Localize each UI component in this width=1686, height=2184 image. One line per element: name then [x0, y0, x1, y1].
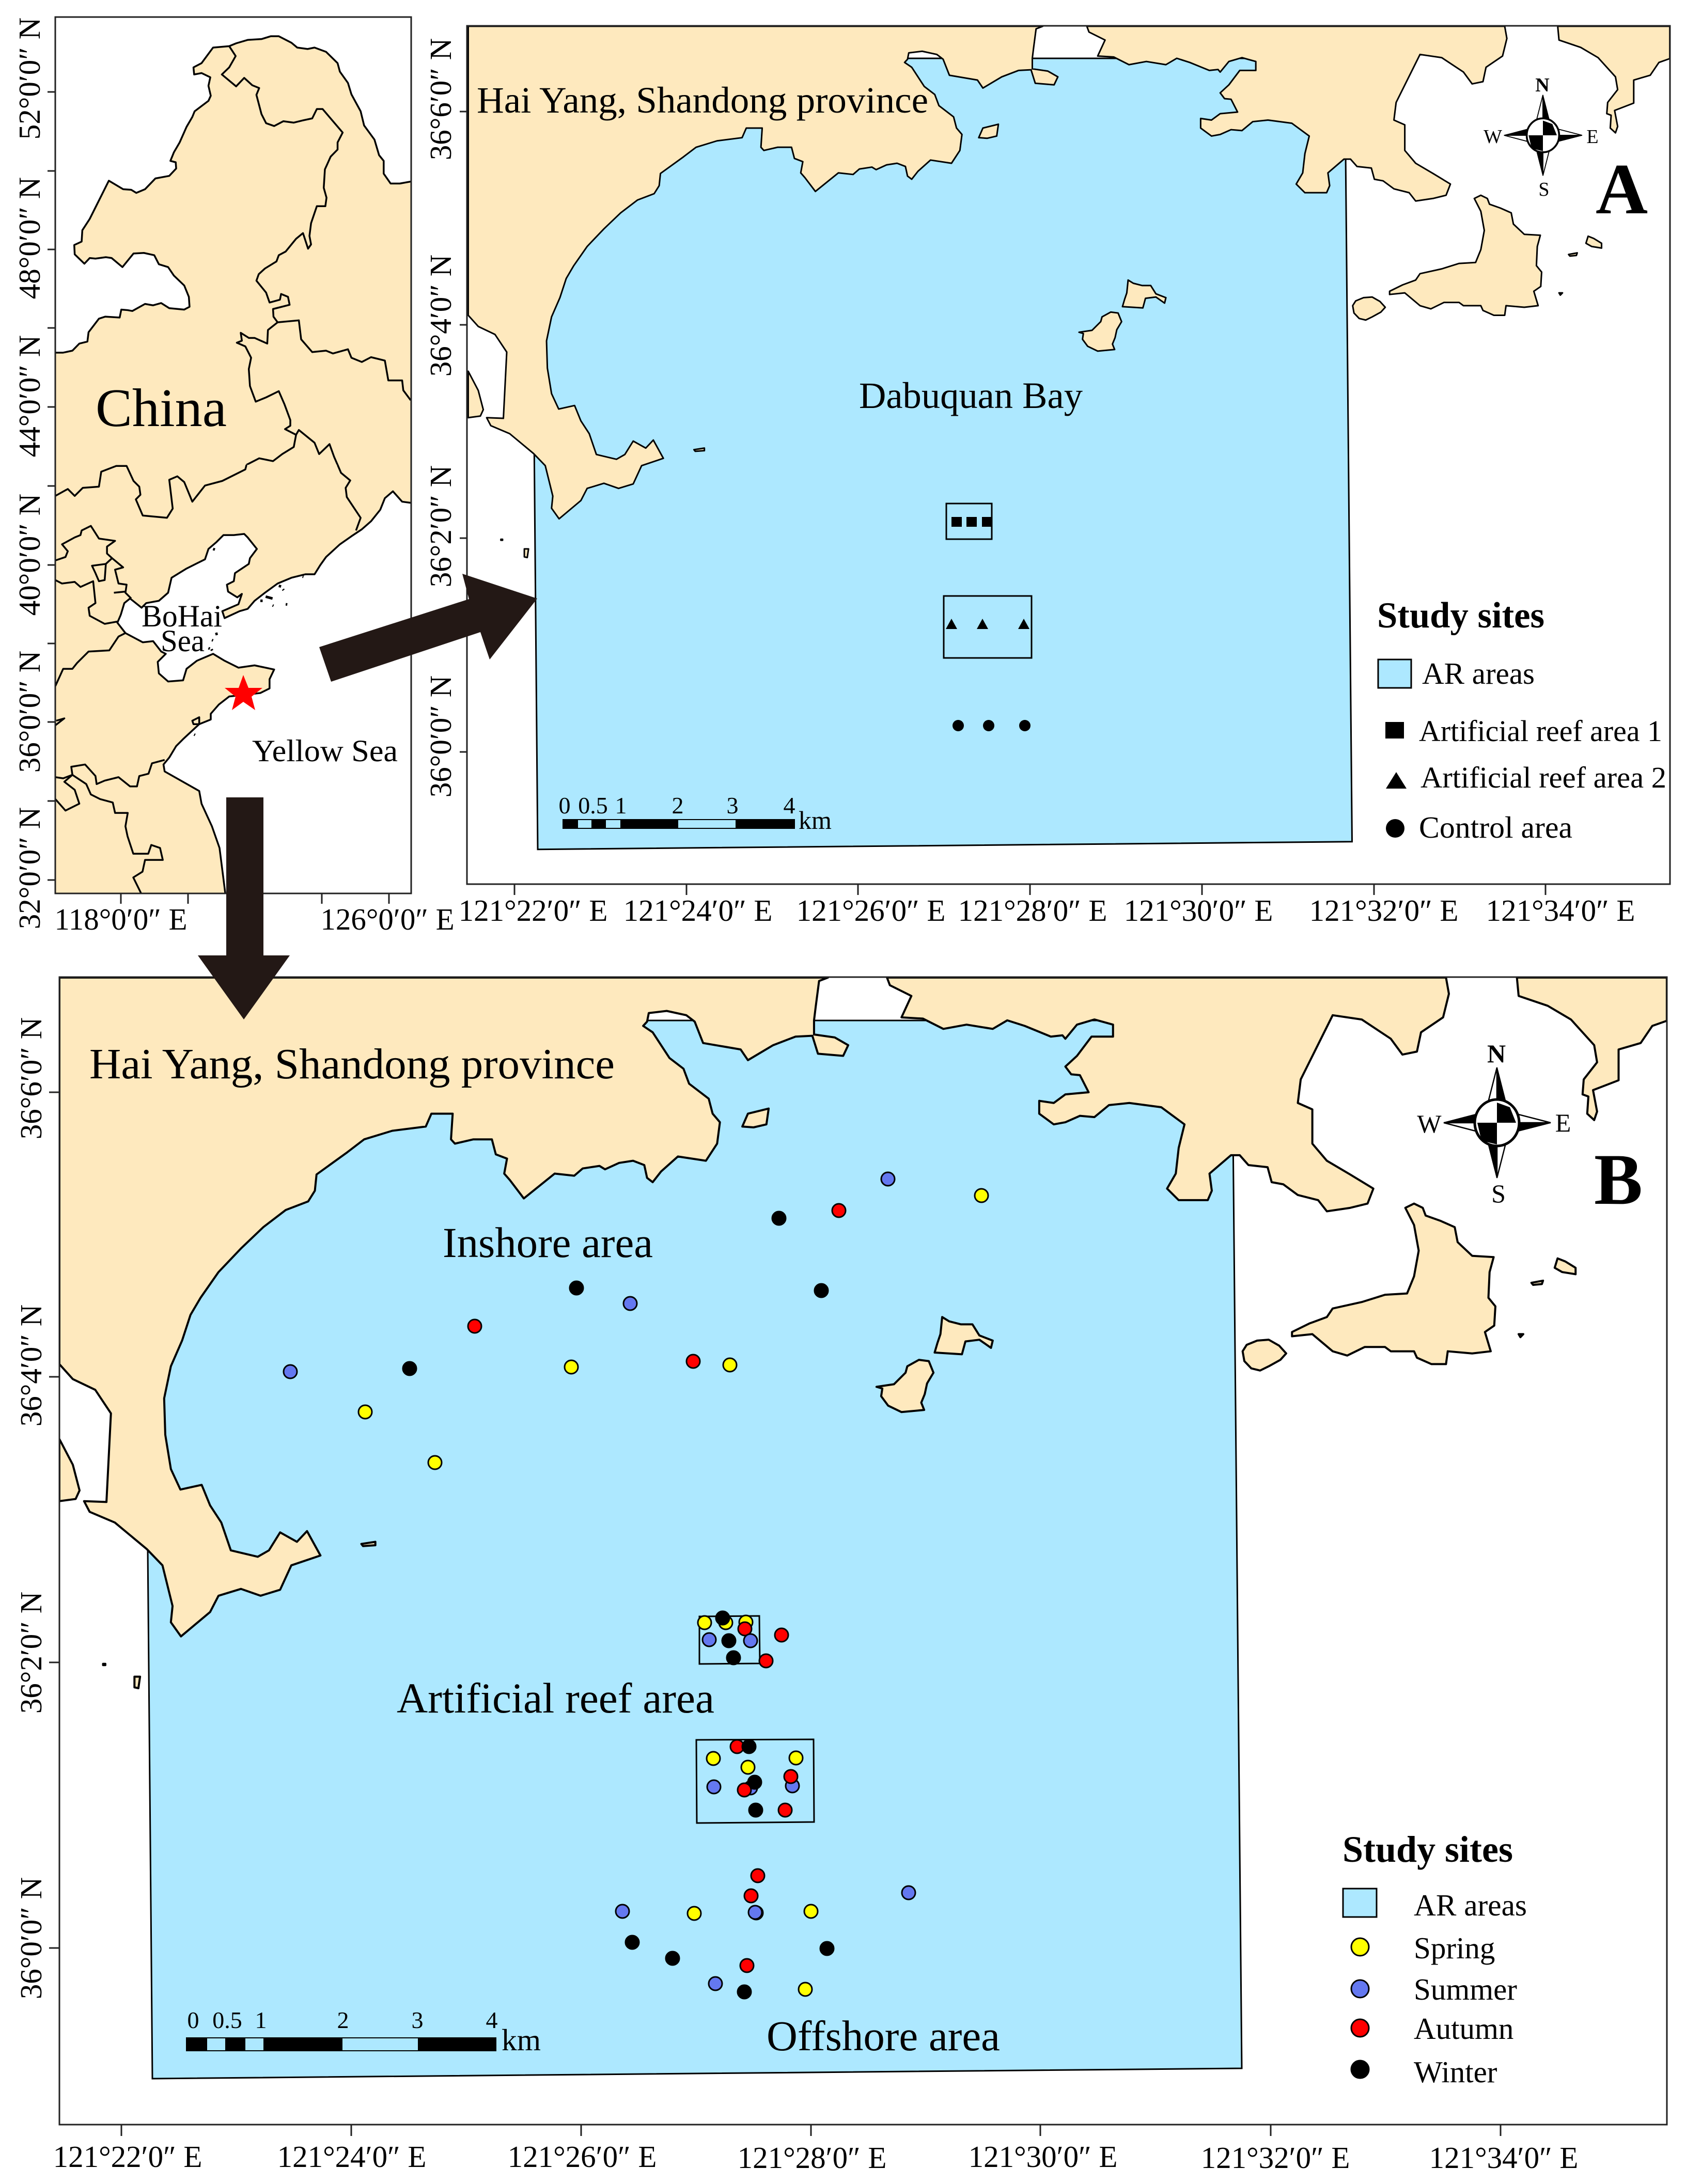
panel B longitude labels: 121°26′0″ E: [508, 2140, 657, 2174]
panel B compass: N: [1487, 1039, 1506, 1068]
panel A scale bar: 0.5: [578, 792, 608, 819]
China north land and provincial borders: [55, 36, 411, 465]
panel A title: Hai Yang: Hai Yang, Shandong province: [477, 80, 928, 121]
artificial reef sampling sites: [698, 1611, 803, 1817]
panel A longitude labels: 121°24′0″ E: [623, 893, 772, 928]
label: Artificial reef area: Artificial reef area: [397, 1674, 714, 1722]
panel B: seasonal sampling map: [14, 977, 1667, 2175]
panel B ticks: [49, 1092, 1501, 2136]
panel B scale bar: 4: [486, 2007, 498, 2033]
panel B latitude labels: 36°2′0″ N: [14, 1592, 48, 1714]
panel B scale bar: 3: [411, 2007, 424, 2033]
China south land and provincial borders: [55, 465, 411, 893]
panel: China overview map: [12, 17, 455, 936]
label: China: China: [96, 378, 227, 438]
inshore sampling sites: [284, 1172, 988, 1469]
panel A scale bar: 1: [615, 792, 627, 819]
panel B base map: [59, 978, 1667, 2079]
panel B longitude labels: 121°32′0″ E: [1201, 2141, 1350, 2175]
panel B longitude labels: 121°28′0″ E: [738, 2141, 886, 2175]
panel A compass: W: [1484, 126, 1502, 148]
China longitude labels: [54, 902, 455, 936]
panel A base map: [468, 26, 1670, 850]
label: Inshore area: Inshore area: [443, 1219, 653, 1266]
panel B legend: [1342, 1829, 1527, 2089]
panel A latitude labels: 36°0′0″ N: [424, 675, 458, 797]
panel B latitude labels: 36°6′0″ N: [14, 1017, 48, 1139]
panel A longitude labels: 121°28′0″ E: [958, 893, 1107, 928]
panel B legend: AR areas: [1414, 1888, 1527, 1922]
arrow: overview to panel B: [198, 797, 290, 1019]
panel A latitude labels: 36°2′0″ N: [424, 465, 458, 587]
panel letter A: A: [1596, 149, 1648, 229]
panel B scale bar: 1: [255, 2007, 267, 2033]
panel B longitude labels: 121°30′0″ E: [969, 2140, 1117, 2174]
panel A legend: AR areas: [1422, 656, 1535, 690]
panel A compass: [1484, 74, 1599, 200]
panel A longitude labels: 121°26′0″ E: [797, 893, 945, 928]
panel A label: Dabuquan Bay: Dabuquan Bay: [859, 375, 1083, 416]
panel A latitude labels: [424, 38, 458, 797]
reef area boxes: [696, 1616, 814, 1823]
panel B frame: [59, 977, 1667, 2125]
panel B compass: W: [1417, 1109, 1442, 1138]
panel A longitude labels: 121°34′0″ E: [1486, 893, 1635, 928]
China longitude labels: 126°0′0″ E: [320, 902, 455, 936]
label: BoHai Sea: [142, 599, 222, 658]
China latitude labels: 48°0′0″ N: [12, 177, 46, 299]
panel B scale bar: 0: [187, 2007, 199, 2033]
label: BoHai Sea: BoHai: [142, 599, 222, 633]
icon: red star location: [225, 675, 262, 710]
panel B longitude labels: 121°22′0″ E: [53, 2140, 202, 2174]
label: BoHai Sea: Sea: [161, 624, 205, 658]
China longitude labels: 118°0′0″ E: [54, 902, 188, 936]
panel B latitude labels: [14, 1017, 48, 1999]
panel B longitude labels: [53, 2140, 1578, 2175]
panel A scale bar: [559, 792, 832, 835]
label: Yellow Sea: Yellow Sea: [252, 734, 398, 768]
China latitude labels: 36°0′0″ N: [12, 651, 46, 773]
panel B compass: [1417, 1039, 1571, 1208]
panel A longitude labels: 121°22′0″ E: [459, 893, 607, 928]
panel A scale bar: 3: [726, 792, 739, 819]
panel A longitude labels: [459, 893, 1635, 928]
panel A compass: E: [1586, 126, 1599, 148]
panel A legend: Study sites: [1377, 595, 1544, 636]
panel B legend: Autumn: [1414, 2012, 1513, 2046]
panel B scale bar: 0.5: [212, 2007, 242, 2033]
panel B compass: S: [1491, 1179, 1506, 1208]
label: Offshore area: Offshore area: [767, 2012, 1000, 2060]
offshore sampling sites: [616, 1869, 915, 1999]
panel A legend: Control area: [1419, 810, 1572, 844]
panel B longitude labels: 121°24′0″ E: [277, 2140, 426, 2174]
reef boxes and sampling markers: [944, 504, 1032, 731]
arrow: overview to panel A: [319, 574, 537, 682]
panel letter B: B: [1594, 1139, 1643, 1220]
panel A ticks: [460, 112, 1546, 895]
panel B longitude labels: 121°34′0″ E: [1429, 2141, 1578, 2175]
panel B latitude labels: 36°4′0″ N: [14, 1305, 48, 1426]
panel A legend: [1377, 595, 1666, 844]
panel A scale bar: 2: [672, 792, 684, 819]
panel A latitude labels: 36°6′0″ N: [424, 38, 458, 160]
China latitude labels: 32°0′0″ N: [12, 807, 46, 929]
China latitude labels: 52°0′0″ N: [12, 18, 46, 139]
panel A latitude labels: 36°4′0″ N: [424, 255, 458, 376]
panel A scale bar: km: [799, 806, 832, 835]
panel B legend: Winter: [1414, 2055, 1497, 2089]
panel B title: Hai Yang: Hai Yang, Shandong province: [89, 1040, 615, 1088]
China frame: [55, 17, 411, 893]
panel B scale bar: [186, 2007, 541, 2057]
panel A legend: Artificial reef area 2: [1420, 761, 1666, 794]
China latitude labels: [12, 18, 46, 929]
panel A frame: [467, 26, 1670, 884]
panel A compass: S: [1538, 179, 1550, 200]
panel A compass: N: [1535, 74, 1550, 96]
panel A scale bar: 0: [559, 792, 570, 819]
panel A scale bar: 4: [783, 792, 795, 819]
China latitude labels: 40°0′0″ N: [12, 494, 46, 616]
panel B legend: Spring: [1414, 1931, 1495, 1965]
panel B scale bar: km: [502, 2023, 541, 2057]
China latitude labels: 44°0′0″ N: [12, 335, 46, 457]
panel A legend: Artificial reef area 1: [1419, 714, 1662, 748]
panel B legend: Study sites: [1342, 1829, 1513, 1870]
panel B legend: Summer: [1414, 1972, 1517, 2006]
panel B compass: E: [1555, 1108, 1571, 1137]
panel A longitude labels: 121°30′0″ E: [1124, 893, 1273, 928]
panel B latitude labels: 36°0′0″ N: [14, 1877, 48, 1999]
panel B scale bar: 2: [337, 2007, 349, 2033]
China ticks: [48, 92, 389, 904]
panel A longitude labels: 121°32′0″ E: [1309, 893, 1458, 928]
panel A: Dabuquan Bay site map: [424, 26, 1670, 928]
